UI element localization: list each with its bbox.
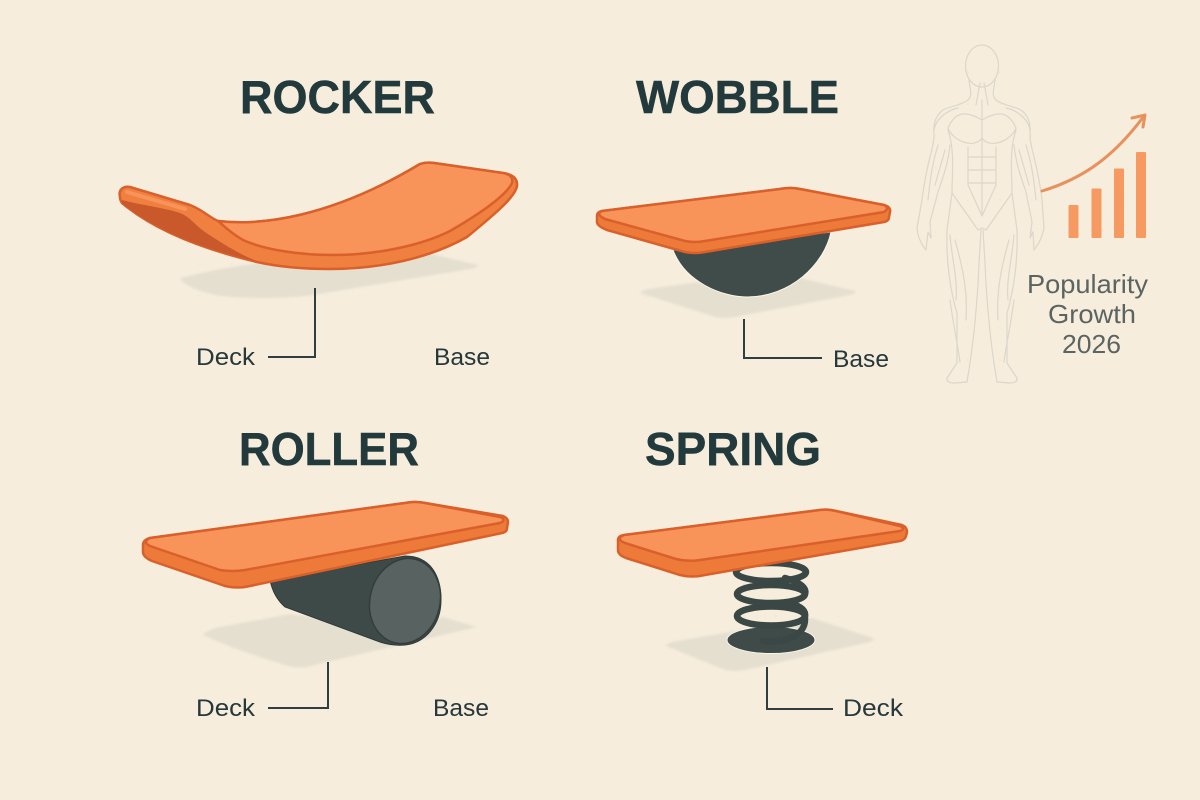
- rocker deck: [120, 163, 517, 269]
- popularity growth caption: 2026: [1062, 329, 1121, 359]
- panel: wobble board: [597, 71, 890, 373]
- deck leader line: [268, 288, 315, 357]
- bars: [1068, 152, 1146, 238]
- label: base: Base: [433, 695, 489, 722]
- muscle anatomy figure: [917, 45, 1044, 383]
- heading: roller: ROLLER: [239, 423, 419, 475]
- roller deck: [143, 502, 508, 588]
- wobble ground shadow: [640, 278, 855, 318]
- label: deck: Deck: [843, 695, 904, 722]
- panel: roller board: [143, 423, 508, 722]
- spring deck: [618, 510, 907, 576]
- panel: rocker board: [120, 71, 517, 371]
- popularity growth caption: Popularity: [1027, 269, 1148, 299]
- spring coil base: [727, 563, 815, 654]
- panel: spring board: [618, 423, 907, 722]
- rocker ground shadow: [180, 253, 478, 298]
- label: base: Base: [434, 344, 490, 371]
- leader line: [767, 667, 833, 709]
- leader line: [268, 662, 328, 708]
- popularity growth bar chart: [1042, 115, 1146, 238]
- leader line: [744, 319, 822, 358]
- wobble deck: [597, 188, 890, 253]
- label: base: Base: [833, 346, 889, 373]
- heading: spring: SPRING: [645, 423, 821, 475]
- spring ground shadow: [666, 618, 874, 671]
- roller ground shadow: [203, 614, 477, 668]
- roller cylinder base: [270, 551, 449, 651]
- label: deck: Deck: [196, 344, 256, 371]
- growth arrow: [1042, 115, 1145, 191]
- wobble dome base: [673, 232, 831, 297]
- heading: wobble: WOBBLE: [636, 71, 839, 123]
- heading: rocker: ROCKER: [240, 71, 435, 123]
- popularity growth caption: Growth: [1048, 299, 1136, 329]
- popularity growth caption: [1027, 269, 1148, 359]
- label: deck: Deck: [196, 695, 256, 722]
